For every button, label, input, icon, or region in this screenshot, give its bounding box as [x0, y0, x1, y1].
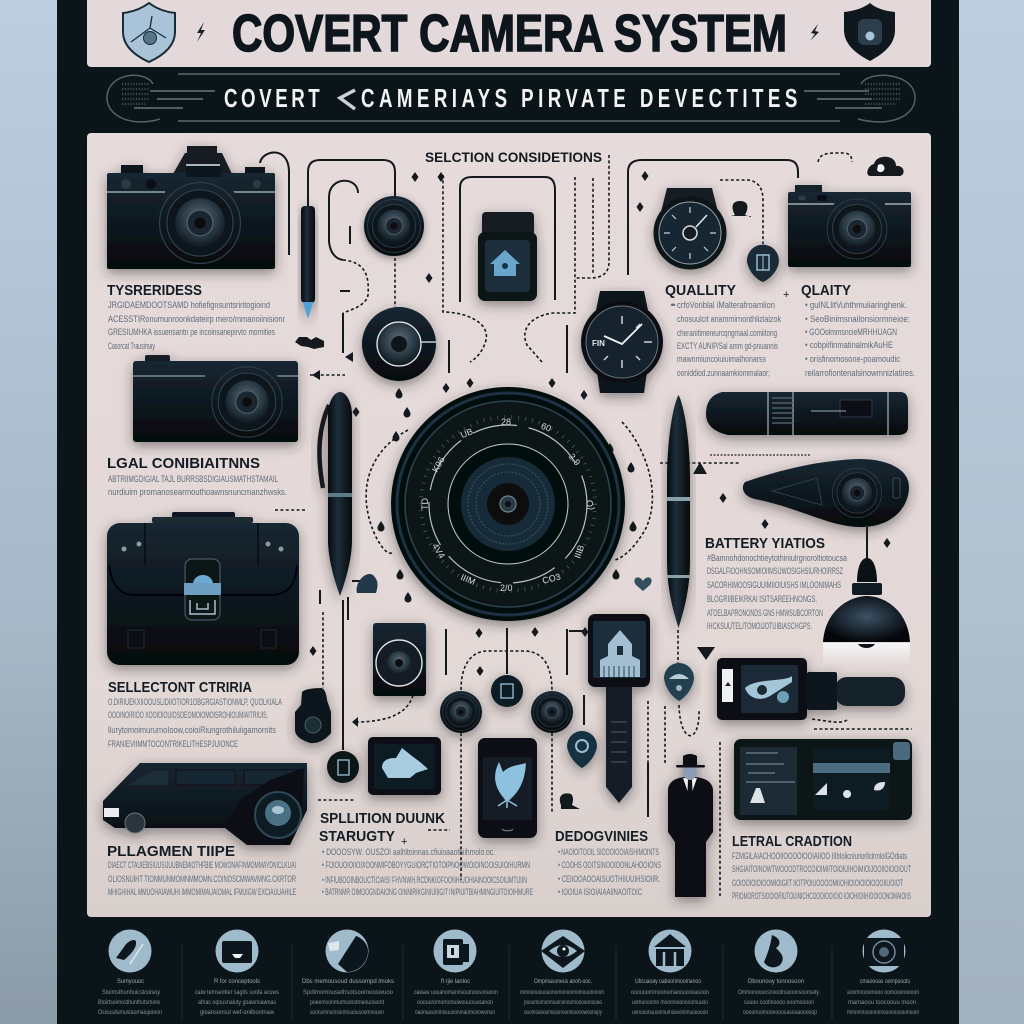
heading: battery: BATTERY YIATIOS	[705, 535, 825, 552]
footer item 8: mmnmnoooonnnoooonoooonoom	[847, 1010, 919, 1016]
text block: split: • FOIOUOIOIIOIXOONMIFOBOYYGUIORCTIOTOIPNOOWOIOINOOISUIOIHURMN	[322, 860, 530, 870]
lens scale numerals: 2.9	[567, 451, 582, 467]
text block: second quality: • cobpiifinmatinalmikAuHE	[805, 340, 893, 350]
footer item 5: mmoonuououonomonoomomouononon	[520, 990, 604, 996]
footer item 3: soonsmnsmsonmsuousoomnouon	[310, 1010, 384, 1016]
text block: legal: ABTRIIMGDIGIAL TAJL BURRSBSDIGIAUSMATHSTAMAIL	[108, 474, 278, 484]
heading: legal: LGAL CONIBIAITNNS	[107, 455, 260, 472]
footer item 1: Btoirtsoimosthunthotsmore	[98, 1000, 161, 1006]
footer item 6	[631, 930, 709, 1016]
camera: middle left	[133, 355, 298, 442]
footer item 5: ooomoanoomosonoonmoonowoonopy	[524, 1010, 602, 1016]
heading: quality: QUALLITY	[665, 282, 736, 299]
text block: selection criteria	[108, 697, 282, 749]
heading: selection considerations: SELCTION CONSIDETIONS	[425, 150, 602, 165]
footer item 4: ooouuromomonuiwouuosuoanon	[417, 1000, 493, 1006]
page background right	[512, 0, 1024, 1024]
gauge watch	[654, 188, 726, 270]
text block: second quality: reilarrofiontenalsinowmnizlatires.	[805, 368, 915, 378]
text block: types: JRGIDAEMDOOTSAMD hofiefignsuntsriritogioind	[108, 300, 270, 310]
small black camera	[373, 623, 426, 696]
text block: battery	[707, 553, 847, 631]
text block: lateral: GOIOOIOIOIOOMIOIGIIT IIOTPOIUOOOOMIIOHIOIOIOIOIOOOIIUOIOT	[732, 878, 903, 888]
tag with battery icon	[747, 245, 779, 282]
lens scale numerals: TD	[420, 498, 430, 510]
text block: placement tips	[108, 860, 296, 897]
text block: lateral	[732, 851, 911, 901]
connector lines	[260, 152, 912, 896]
screen with cloud icon	[368, 737, 441, 795]
pen-shaped flashlight camera	[706, 392, 908, 435]
footer item 7: suuoo cootinoooo ooomoooon	[744, 1000, 814, 1006]
footer item 1: Stuimsthunhuicstcoisoy	[102, 990, 160, 996]
heading: strategy: STARUGTY	[319, 828, 395, 845]
text block: placement tips: OLIOSNUIHT TIONMUNMOMNMMOMN.COINOSCMWAVMNG.CKRTOR	[108, 874, 296, 884]
round lens trio	[440, 675, 573, 733]
phone with leaf icon	[478, 738, 537, 838]
text block: quality	[670, 300, 781, 378]
round lens camera 1	[364, 196, 424, 256]
footer item 6: ooouoornmoonomaoouoooasoon	[631, 990, 709, 996]
text block: types: GRESIUMHKA issuensantn pe incoinsanepirvto mornities	[108, 327, 275, 337]
footer item 6: Ubcuaoay oaboorimoomanoo	[635, 978, 701, 985]
footer item 1: Sumyouoc	[117, 978, 145, 985]
teardrop camera	[743, 459, 909, 527]
heading: split: SPLLITION DUUNK	[320, 810, 445, 827]
heading: placement tips: PLLAGMEN TIIPE	[107, 843, 235, 860]
footer item 8: cmaoooas oompooots	[860, 978, 911, 985]
text block: selection criteria: O.DIRIUEKXIIOOUSLIDIIOTIOR1OBGRGIASTIONMLP, QUOLKIALA	[108, 697, 282, 707]
footer item 8	[847, 930, 919, 1016]
briefcase	[107, 512, 299, 665]
text block: battery: DSGALFIOOHNSOMIOIIMSUWOSIGHSIURHOIRRSZ	[707, 566, 843, 576]
footer item 4: fl rjie lanloc	[441, 978, 471, 985]
pendant lamp camera	[823, 558, 910, 665]
text block: deductibles: • IOOIUA ISIOIAIAAIINAOITOIC	[558, 887, 642, 897]
text block: legal	[108, 474, 287, 497]
icon: right lightning	[810, 24, 819, 41]
footer item 2: afnas oqousnaluty goawnsawnas	[198, 1000, 276, 1006]
lens scale numerals: UB	[459, 426, 474, 440]
lens scale numerals: IIIM	[459, 572, 477, 587]
footer item 5: pooumomonnoamonoomooooonoooo	[524, 1000, 603, 1006]
lens scale numerals: (O	[585, 500, 595, 510]
lens scale numerals: CO3	[541, 571, 562, 586]
footer item 4: oaonuasonmiouuoonmaomonowonon	[415, 1010, 495, 1016]
pen: right of main lens	[667, 395, 690, 628]
heading: second quality: QLAITY	[801, 282, 851, 299]
heading: lateral: LETRAL CRADTION	[732, 833, 852, 850]
small marks	[310, 171, 890, 727]
text block: selection criteria: llurytomoimurumoIoow,coioiRiungrothiluiigamornits	[108, 725, 276, 735]
camera: top left	[107, 146, 275, 269]
text block: types: Casorcat Trausimay	[108, 341, 155, 351]
text block: quality: •	[670, 300, 676, 310]
text block: battery: BLOGRIIBEIKRKAI ISITSAREEHNONGS.	[707, 594, 817, 604]
small clip camera	[295, 688, 331, 743]
lens scale numerals: IIIB	[572, 544, 586, 560]
tag icon small	[327, 751, 359, 783]
text block: split	[322, 847, 533, 897]
van with camera	[103, 763, 307, 845]
text block: deductibles: • CEIIOOAOOAISUOTHIIUUIHSIOIIR.	[558, 874, 660, 884]
wristwatch	[581, 291, 663, 393]
header panel	[87, 0, 931, 67]
text block: legal: nurdiuim promanosearmouthoawnsnuncmanzhwsks.	[108, 487, 287, 497]
footer item 5	[520, 930, 604, 1016]
footer item 6: uonuuonuuoomumiuwommuouooon	[632, 1010, 708, 1016]
wristwatch: FIN	[592, 339, 605, 348]
footer item 3: Dbs memousoud dussompd lmoks	[302, 978, 395, 985]
text block: battery: #Bamnohdonochtieytothiniulrgnoroltiotoucsa	[707, 553, 847, 563]
icons: small people and cloud	[295, 157, 904, 809]
text block: types: ACESSTIRonumunroonkdateirp mero/mmanoiinisionr	[108, 314, 285, 324]
text block: selection criteria: OOOINOIRIOO XOOIOIOUIOSOEOMOIOMOISROHIOUMIAITRIUIS.	[108, 710, 268, 720]
footer item 7: Ommonoouosnooolnsooonsoonsety.	[738, 990, 820, 996]
tag icon	[567, 731, 597, 768]
strap device camera	[717, 658, 905, 720]
text block: split: • INFIUBOOINBOUCTICIAIS! FHVNWH.RCDNKIOFOONHIUOHIAINOOICSOIUMTUIIN	[322, 875, 527, 885]
footer item 2	[195, 930, 279, 1016]
lens scale numerals: 2/0	[500, 583, 513, 593]
text block: types	[108, 300, 285, 351]
plus mark 2: +	[401, 836, 407, 848]
footer item 1: Osisusdumustaomaiuponon	[98, 1010, 162, 1016]
footer item 7: oooonoomoonooosasooaooooop	[743, 1010, 818, 1016]
lens scale numerals: K96	[430, 455, 447, 474]
pen with blue tip	[301, 206, 315, 319]
camera: top right	[788, 185, 911, 267]
round lens camera 2	[362, 307, 436, 381]
subtitle text continued: CAMERIAYS PIRVATE DEVECTITES	[361, 83, 797, 113]
text block: second quality	[805, 300, 915, 378]
text block: split: • DOOOSYW. OUSZOI aalhltoinnas.cfiuioaaothiihmolo.oc.	[322, 847, 495, 857]
page background	[0, 0, 512, 1024]
icon: right shield	[844, 3, 895, 61]
text block: quality: cheranitimereurcqngmaal.comiitong	[677, 328, 777, 338]
text block: second quality: • orisfinomosone-poamoudic	[805, 354, 900, 364]
footer item 2: calw temsemter sagits soofa acuws	[195, 990, 279, 996]
lens scale numerals: 28	[501, 417, 511, 427]
title: COVERT CAMERA SYSTEM	[232, 5, 787, 63]
text block: placement tips: MHIGHIHAL MMUOHAIAWUHI IMMOMIMAUAIOMAL IFMUIGW EXCIAUUAHILE	[108, 887, 296, 897]
icon: left shield	[123, 3, 175, 62]
lens scale numerals: 60	[540, 421, 553, 434]
text block: quality: crfoVonblal iMalterafroamlion	[677, 300, 775, 310]
footer item 3: Spdimomnusethsotsoomooswuoo	[303, 990, 394, 996]
device with house icon	[478, 212, 537, 301]
footer item 4	[414, 930, 498, 1016]
footer item 8: mamaoou toocoouu moon	[848, 1000, 916, 1006]
footer item 2: gloansonsut wef-onilbontnaw	[200, 1010, 275, 1016]
footer strip	[98, 930, 919, 1020]
text block: split: • BATRNMR OIMOOGNDAIONG OINNIRIKGINIUIIIGIT INIPIUITBIAHMINGIUITOIOIHMURE	[322, 887, 533, 897]
footer item 7: Dbounooy tonnosoon	[748, 978, 804, 985]
small note line	[710, 454, 811, 456]
text block: deductibles: • NAOIOITOOIL SIOOOIOOIAISHIMOINTS	[558, 847, 659, 857]
lens scale numerals	[420, 417, 595, 593]
text block: second quality: • GOOolmmsncieMRHHUAGN	[805, 327, 897, 337]
text block: battery: SACORHIMOOSIGUUIMIIOIUISHS IMLOONIMAHS	[707, 580, 841, 590]
footer item 5: Ompmasoneus anoh-ooc.	[534, 978, 592, 985]
main lens	[391, 387, 625, 621]
text block: deductibles	[558, 847, 661, 897]
text block: quality: mawnmiuncoiuiuimalhonarss	[677, 354, 766, 364]
tablet device	[734, 739, 912, 820]
text block: second quality: • SeoBinimsnailonsiormneioe:	[805, 314, 910, 324]
footer item 6: uomunoomn moomooonooomuuon	[632, 1000, 708, 1006]
text block: lateral: FZMGILAIACHOOIIOOOOIOOIAIIOO IIIbIolicnluriorllclrmlolGOdiats	[732, 851, 907, 861]
subtitle text: COVERT	[224, 83, 320, 113]
text block: placement tips: DIAECT CTAUIEBSIUUSIJUUBNEMIOTHFBIE MOWONAFINMOMMAYDNICLKUAI	[108, 860, 296, 870]
text block: second quality: • gulNLlitVuhthmuiiaringhenk.	[805, 300, 907, 310]
footer item 4: cawaw uouanomannsoumoosonuoon	[414, 990, 498, 996]
main panel	[87, 133, 931, 917]
chevron	[340, 90, 355, 109]
text block: quality: chosuulcit anammirnonthlizlalzok	[677, 314, 781, 324]
text block: quality: EXCTY AUNIP/Sal amm gd-pnuannis	[677, 341, 778, 351]
heading: selection criteria: SELLECTONT CTRIRIA	[108, 679, 252, 696]
text block: battery: IHCKSUUTELITOMOIJOTUIBIASCHGPS.	[707, 621, 812, 631]
subtitle banner	[107, 74, 915, 122]
lens scale numerals: 4V4	[430, 541, 447, 560]
text block: quality: ooniddiod.zunnaamkiommalaor;	[677, 368, 770, 378]
footer item 3	[302, 930, 395, 1016]
pen: left of main lens	[319, 392, 352, 596]
heading: deductibles: DEDOGVINIES	[555, 828, 648, 845]
location tag icon	[664, 663, 694, 701]
text block: selection criteria: FRANIEVIIMMTOCONTRIKELITHESPJUIONCE	[108, 739, 238, 749]
footer item 1	[98, 930, 162, 1016]
heading: types: TYSRERIDESS	[107, 282, 202, 299]
footer item 8: aoomnooomooo oomooonoooon	[847, 990, 919, 996]
footer item 3: poeemsonmumsonstmeouosomt	[310, 1000, 384, 1006]
watch with house screen	[588, 614, 650, 803]
text block: battery: ATOELBAPRONONDS GNS HMWSUBCORTON	[707, 608, 823, 618]
man in black with hat	[668, 754, 713, 897]
footer item 7	[738, 930, 820, 1016]
plus mark: +	[783, 289, 789, 301]
footer item 2: R for conceptools	[214, 978, 261, 985]
icon: left lightning	[197, 22, 205, 42]
text block: deductibles: • COOHS OOITSINOOIOONLAHOOIONS	[558, 860, 661, 870]
